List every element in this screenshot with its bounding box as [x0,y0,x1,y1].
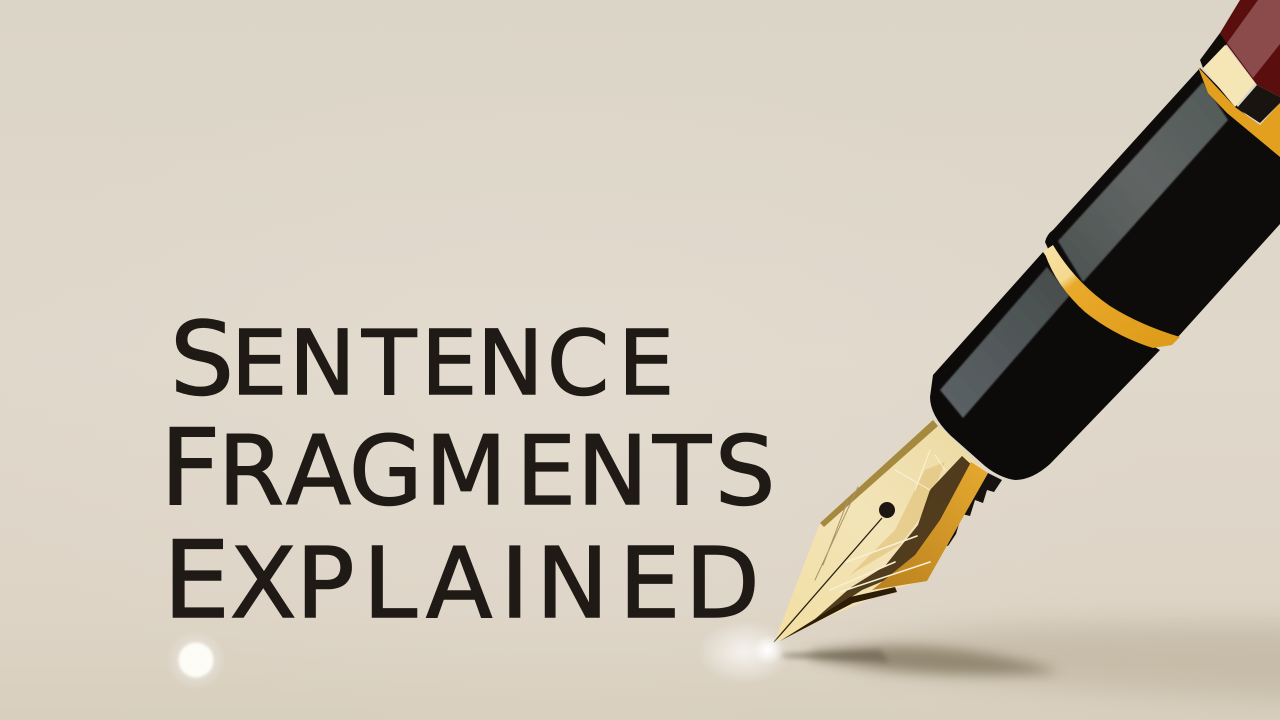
title: Sentence Fragments Explained [160,300,775,642]
gold nib [774,420,988,643]
title line: Sentence: SENTENCE [170,300,674,418]
glowing white dot [166,630,226,690]
title line: Fragments: FRAGMENTS [160,407,775,529]
grip highlight [940,267,1070,418]
nib dark reflection [805,456,975,628]
sparkle glow at nib tip [697,620,793,684]
nib orange facet [872,462,988,590]
nib body [774,420,988,643]
pen feed teeth [936,470,1002,546]
pen shadow on paper [782,624,1280,705]
nib gold sheen [850,462,945,575]
upper gold band [1198,33,1280,157]
barrel highlight [1058,82,1228,282]
nib slit [774,518,882,642]
black upper barrel [1045,68,1280,338]
nib lower edge [780,587,897,641]
black grip section [930,252,1160,480]
fountain pen [697,0,1280,684]
nib breather hole [879,502,895,518]
nib engraving lines [815,450,945,592]
burgundy cap end [1220,0,1280,97]
cap highlight [1227,0,1280,78]
nib upper edge [820,420,938,527]
title line: Explained: EXPLAINED [163,519,760,642]
lower gold band [1044,245,1180,348]
